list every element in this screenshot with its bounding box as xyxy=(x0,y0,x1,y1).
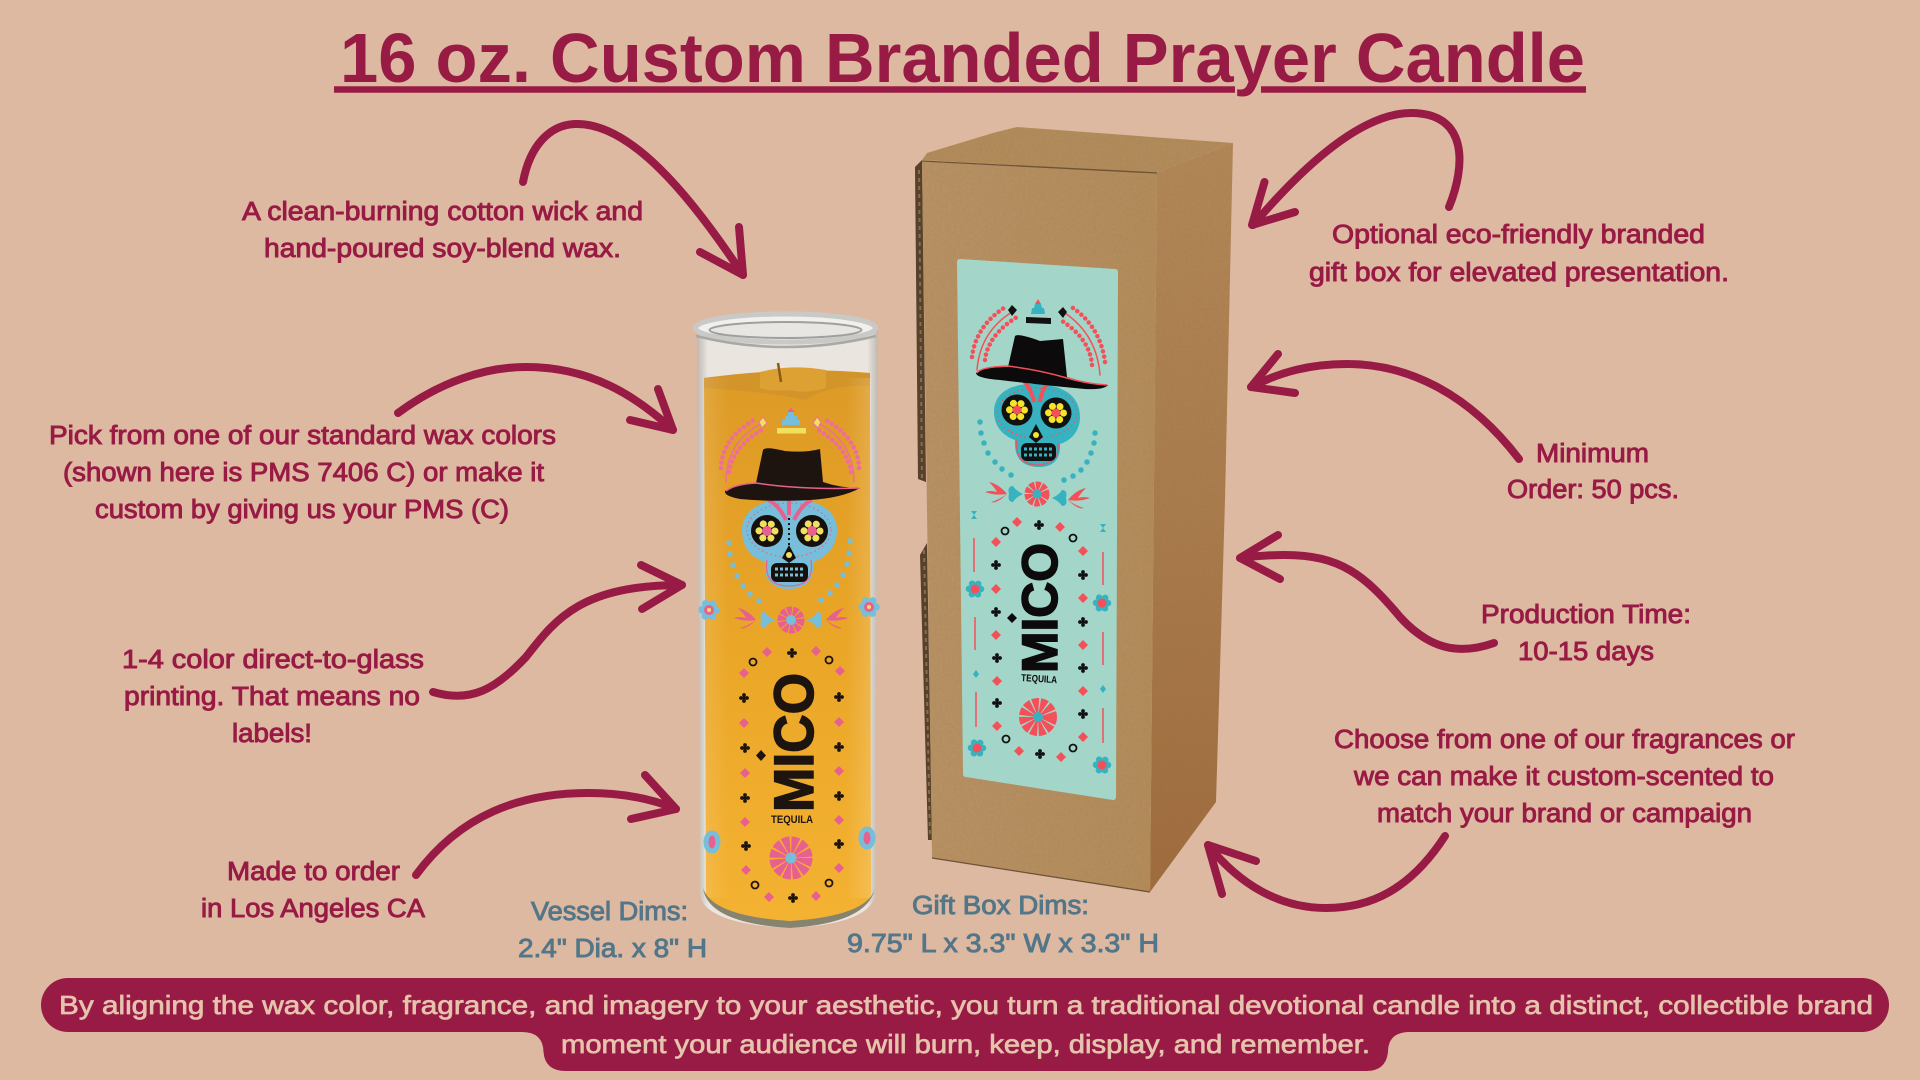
candle print: hat xyxy=(725,448,860,501)
text: gift box xyxy=(1309,221,1729,287)
text: gift box: gift box for elevated presentation. xyxy=(1309,259,1729,287)
candle print: TEQUILA: TEQUILA xyxy=(771,814,813,826)
text: direct-to-glass printing: 1-4 color direct-to-glass xyxy=(122,646,424,674)
text: made to order: in Los Angeles CA xyxy=(201,895,425,923)
text: vessel dimensions: 2.4" Dia. x 8" H xyxy=(518,935,707,963)
text: production time: Production Time: xyxy=(1481,601,1691,629)
text: minimum order xyxy=(1507,440,1679,504)
arrow: wax color callout xyxy=(398,367,673,430)
glass sheen xyxy=(704,378,871,898)
box label xyxy=(957,259,1118,800)
box front face xyxy=(922,161,1157,892)
wax top xyxy=(704,363,870,400)
text: minimum order: Minimum xyxy=(1536,440,1649,468)
text: fragrance: Choose from one of our fragrances or xyxy=(1334,726,1796,754)
cardboard texture xyxy=(910,120,1240,900)
candle print: clubs xyxy=(741,650,842,901)
glass rim xyxy=(696,314,876,347)
candle print: big flower xyxy=(778,845,804,871)
text: vessel dimensions: Vessel Dims: xyxy=(531,898,688,926)
gift box xyxy=(910,120,1240,900)
label print: MICO logo: MICO xyxy=(1012,543,1068,673)
label print: clubs xyxy=(993,522,1086,757)
label print: sugar skull xyxy=(994,378,1080,467)
text: wax colors xyxy=(49,422,556,524)
label print: wreaths xyxy=(972,305,1105,375)
wax fill xyxy=(704,373,871,921)
arrow: production time callout xyxy=(1240,535,1494,649)
closing banner: moment your audience will burn, keep, display, and remember. xyxy=(561,1029,1370,1059)
text: wax colors: (shown here is PMS 7406 C) or make it xyxy=(63,459,544,487)
corrugated edge xyxy=(915,160,932,840)
text: wax colors: Pick from one of our standard wax colors xyxy=(49,422,556,450)
label print: TEQUILA: TEQUILA xyxy=(1021,673,1057,686)
closing banner: By aligning the wax color, fragrance, and imagery to your aesthetic, you turn a traditional devotional candle into a distinct, collectible brand xyxy=(59,990,1873,1020)
label print: dot arcs xyxy=(980,422,1095,480)
text: fragrance xyxy=(1334,726,1796,828)
text: gift box dimensions xyxy=(847,892,1159,958)
closing banner xyxy=(41,978,1889,1071)
glass vessel xyxy=(697,330,878,928)
label print: big flower xyxy=(1026,706,1050,728)
text: wick and wax: hand-poured soy-blend wax. xyxy=(264,235,621,263)
text: fragrance: we can make it custom-scented to xyxy=(1353,763,1774,791)
label print: small diamond xyxy=(1007,613,1017,623)
arrow: printing callout xyxy=(433,565,682,696)
text: made to order: Made to order xyxy=(227,858,401,886)
label print: flower centres xyxy=(970,584,1106,770)
text: wax colors: custom by giving us your PMS (C) xyxy=(95,496,509,524)
label print: top motif xyxy=(1026,299,1051,324)
candle print: small diamond xyxy=(756,750,766,761)
candle print: MICO logo: MICO xyxy=(762,673,825,812)
arrow: made to order callout xyxy=(416,775,676,875)
candle xyxy=(696,314,878,928)
label print: side flowers xyxy=(969,583,1108,771)
box top face xyxy=(922,127,1233,173)
text: made to order xyxy=(201,858,425,923)
label print: flower row xyxy=(985,482,1090,508)
text: production time: 10-15 days xyxy=(1518,638,1654,666)
text: wick and wax: A clean-burning cotton wick and xyxy=(242,198,643,226)
label print: teal accents xyxy=(971,511,1106,693)
candle print: wreaths xyxy=(721,417,859,482)
text: direct-to-glass printing: labels! xyxy=(232,720,312,748)
arrow: wick callout xyxy=(523,124,743,275)
text: direct-to-glass printing: printing. That means no xyxy=(124,683,420,711)
candle print: side flowers xyxy=(706,829,873,851)
arrow: fragrance callout xyxy=(1208,836,1445,908)
title: 16 oz. Custom Branded Prayer Candle xyxy=(340,19,1585,97)
candle print: rings xyxy=(750,656,832,888)
text: gift box dimensions: 9.75" L x 3.3" W x 3.3" H xyxy=(847,930,1159,958)
label print: hat xyxy=(976,335,1108,389)
label print: red diamonds xyxy=(991,517,1088,762)
arrow: gift box callout xyxy=(1252,113,1459,225)
text: gift box: Optional eco-friendly branded xyxy=(1332,221,1705,249)
label print: side lines xyxy=(974,538,1103,743)
candle print: top motif xyxy=(777,408,806,434)
candle print: sugar skull xyxy=(742,499,837,589)
text: direct-to-glass printing xyxy=(122,646,424,748)
text: production time xyxy=(1481,601,1691,666)
box side face xyxy=(1150,143,1233,892)
text: vessel dimensions xyxy=(518,898,707,963)
label print: rings xyxy=(1002,528,1076,752)
glass base xyxy=(703,888,875,928)
candle print: flower row xyxy=(702,600,876,629)
arrow: minimum order callout xyxy=(1251,354,1519,459)
text: wick and wax xyxy=(242,198,643,263)
text: fragrance: match your brand or campaign xyxy=(1377,800,1752,828)
text: gift box dimensions: Gift Box Dims: xyxy=(912,892,1089,920)
candle print: dot arcs xyxy=(729,541,850,601)
text: minimum order: Order: 50 pcs. xyxy=(1507,476,1679,504)
candle print: pink diamonds xyxy=(739,646,845,902)
